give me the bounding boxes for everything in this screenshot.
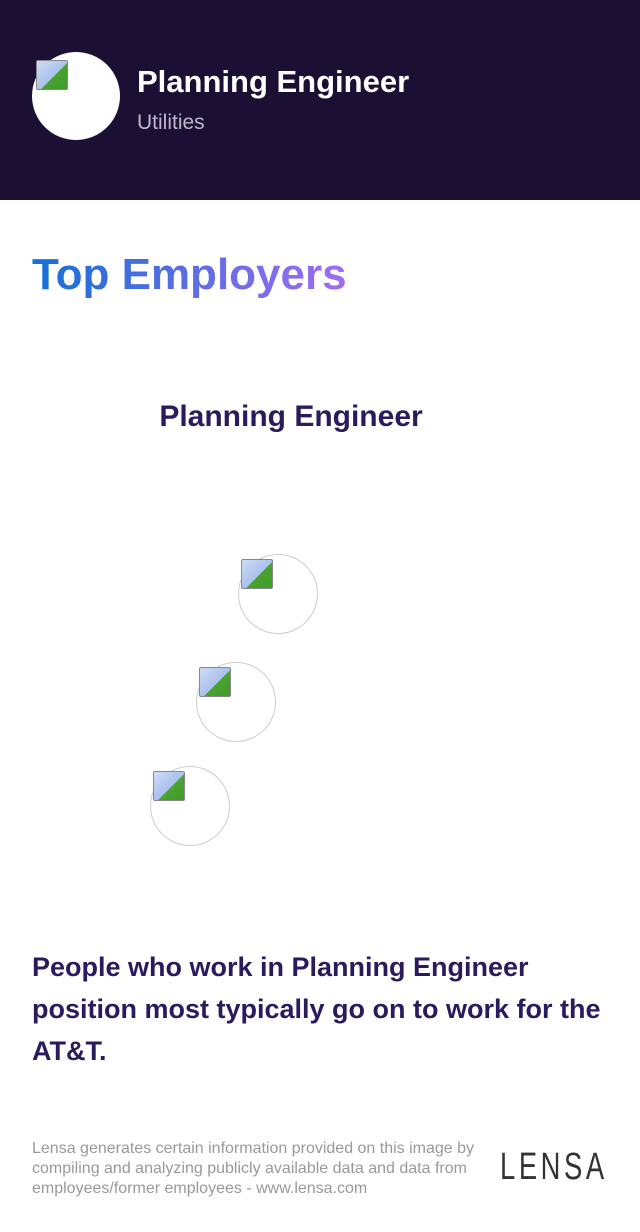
header xyxy=(0,0,640,200)
logo 1 xyxy=(238,554,318,634)
chart title: Planning Engineer xyxy=(159,400,423,433)
footer disclaimer xyxy=(32,1140,474,1197)
footer disclaimer: Lensa generates certain information provided on this image by xyxy=(32,1140,474,1157)
summary text: People who work in Planning Engineer xyxy=(32,952,529,982)
header subtitle: Utilities xyxy=(137,111,205,134)
summary text xyxy=(32,952,601,1066)
footer disclaimer: employees/former employees - www.lensa.com xyxy=(32,1180,367,1197)
logo: LENSA: LENSA xyxy=(500,1146,608,1188)
employer logos xyxy=(150,554,318,846)
heading: Top Employers: Top Employers xyxy=(32,250,347,299)
summary text: AT&T. xyxy=(32,1036,106,1066)
header title: Planning Engineer xyxy=(137,64,409,99)
avatar xyxy=(32,52,120,140)
footer disclaimer: compiling and analyzing publicly available data and data from xyxy=(32,1160,467,1177)
logo 3 xyxy=(150,766,230,846)
logo 2 xyxy=(196,662,276,742)
summary text: position most typically go on to work for the xyxy=(32,994,601,1024)
